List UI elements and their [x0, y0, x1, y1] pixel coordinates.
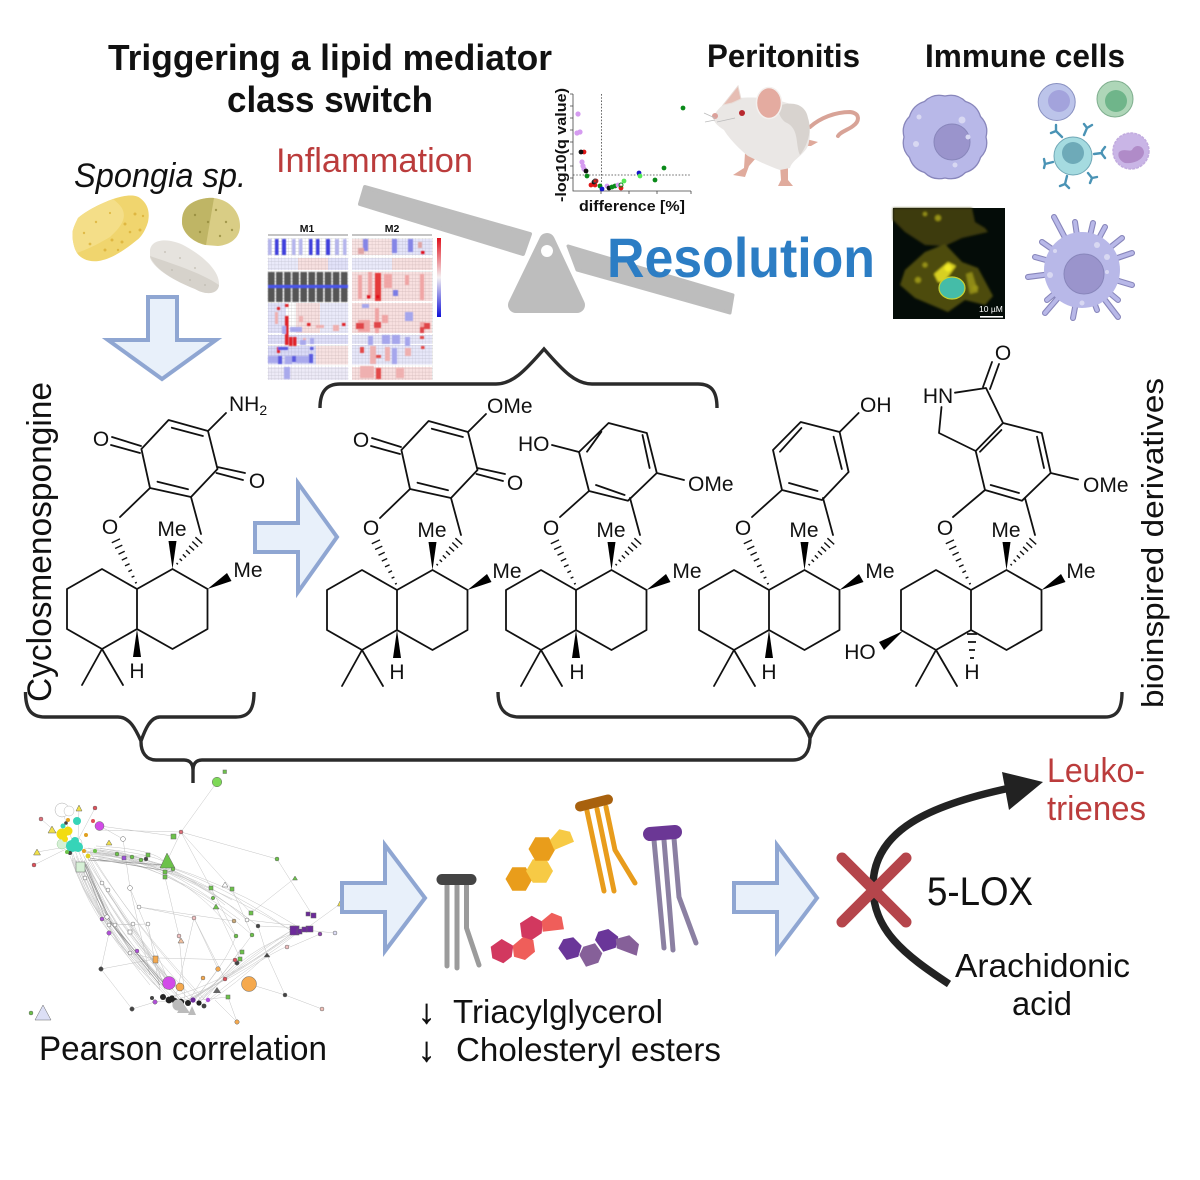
label: lipid decreases: Triacylglycerol — [453, 993, 663, 1030]
icon: immune cell spiky — [1028, 217, 1132, 318]
molecule: isoindolinone derivative: OMe — [1083, 474, 1129, 497]
volcano plot: -log10(q value) — [554, 88, 570, 202]
molecule: HO OMe arene — [506, 423, 734, 686]
heatmap: M1 — [300, 223, 314, 235]
molecule: phenol: Me — [865, 560, 895, 583]
heatmap background tints — [268, 239, 432, 380]
icon: red steroid hexagons — [491, 913, 564, 963]
brace: lower connecting braces — [26, 692, 1122, 783]
label: lipid decreases: ↓ — [418, 993, 435, 1031]
molecule: HO OMe arene: H — [569, 661, 585, 684]
molecule: HO OMe arene: Me — [596, 519, 626, 542]
molecule: cyclosmenospongine: O — [102, 516, 118, 539]
molecule: phenol: O — [735, 517, 751, 540]
molecule: isoindolinone derivative: H — [964, 661, 980, 684]
molecule: OMe quinone: Me — [417, 519, 447, 542]
heading: Immune cells: Immune cells — [925, 38, 1125, 74]
pathway arrow: arachidonic acid to leukotrienes — [873, 772, 1043, 984]
icon: gold steroid hexagons — [506, 829, 574, 891]
arrow: lipids to 5-LOX — [734, 845, 817, 951]
label: lipid decreases: Cholesteryl esters — [456, 1031, 721, 1068]
molecule: HO OMe arene: Me — [672, 560, 702, 583]
molecule: isoindolinone derivative: O — [995, 342, 1011, 365]
icon: immune cell round — [903, 95, 987, 179]
icon: mouse — [704, 86, 858, 186]
heatmap — [267, 223, 441, 380]
volcano plot — [554, 88, 691, 215]
title: Triggering a lipid mediator — [108, 37, 552, 78]
molecule: phenol — [699, 394, 895, 686]
seesaw balance — [360, 187, 733, 313]
label: Resolution: Resolution — [607, 226, 875, 289]
icon: lymphocytes — [1038, 81, 1149, 188]
label: 5-LOX: 5-LOX — [927, 870, 1033, 914]
label: Leukotrienes: Leuko- — [1047, 752, 1145, 790]
heatmap colour scale — [437, 238, 441, 317]
arrow: network to lipids — [342, 845, 425, 951]
network graph — [29, 770, 342, 1024]
molecule: cyclosmenospongine: Me — [157, 518, 187, 541]
brace: top bracket — [320, 349, 717, 408]
label: Leukotrienes — [1047, 752, 1146, 828]
molecule: cyclosmenospongine: NH — [229, 393, 259, 416]
label: Pearson correlation: Pearson correlation — [39, 1030, 327, 1068]
volcano plot: difference [%] — [579, 199, 685, 215]
label: lipid decreases — [418, 993, 721, 1069]
icon: inhibition cross — [842, 858, 906, 922]
molecule: cyclosmenospongine: 2 — [259, 402, 267, 418]
molecule: phenol: H — [761, 661, 777, 684]
molecule: cyclosmenospongine: O — [249, 470, 265, 493]
label: Leukotrienes: trienes — [1047, 790, 1146, 828]
label: Inflammation: Inflammation — [276, 142, 473, 180]
molecule: OMe quinone: H — [389, 661, 405, 684]
molecule: phenol: OH — [860, 394, 892, 417]
molecule: cyclosmenospongine — [67, 393, 267, 685]
icon: orange lipid — [580, 800, 635, 891]
molecule: cyclosmenospongine: O — [93, 428, 109, 451]
micrograph — [893, 208, 1005, 319]
molecule: isoindolinone derivative: Me — [991, 519, 1021, 542]
molecule: isoindolinone derivative: HN — [923, 385, 953, 408]
icon: grey lipid — [442, 880, 479, 968]
molecule: OMe quinone: OMe — [487, 395, 533, 418]
icon: purple lipid — [650, 832, 696, 950]
molecule: OMe quinone: O — [353, 429, 369, 452]
heatmap: M2 — [385, 223, 399, 235]
label: Arachidonic acid — [955, 947, 1130, 1022]
molecule: HO OMe arene: OMe — [688, 473, 734, 496]
icon: sponges — [72, 195, 240, 293]
micrograph: 10 µM — [979, 304, 1003, 314]
molecule: cyclosmenospongine: H — [129, 660, 145, 683]
molecule: isoindolinone derivative: HO — [844, 641, 876, 664]
arrow: to derivatives — [255, 483, 337, 592]
heatmap M1 colour cells — [268, 239, 348, 379]
molecule: OMe quinone: O — [363, 517, 379, 540]
molecule: OMe quinone: Me — [492, 560, 522, 583]
label: lipid decreases: ↓ — [418, 1031, 435, 1069]
molecule: HO OMe arene: O — [543, 517, 559, 540]
heading: Peritonitis: Peritonitis — [707, 38, 860, 74]
molecule: HO OMe arene: HO — [518, 433, 550, 456]
molecule: OMe quinone — [327, 395, 533, 686]
label: bioinspired derivatives: bioinspired derivatives — [1135, 378, 1170, 708]
molecule: cyclosmenospongine: Me — [233, 559, 263, 582]
molecule: phenol: Me — [789, 519, 819, 542]
title — [108, 37, 552, 120]
molecule: OMe quinone: O — [507, 472, 523, 495]
label: Arachidonic acid: Arachidonic — [955, 947, 1130, 984]
molecule: isoindolinone derivative: O — [937, 517, 953, 540]
label: Arachidonic acid: acid — [1012, 985, 1072, 1022]
arrow: down from sponges — [108, 297, 216, 379]
molecule: isoindolinone derivative: Me — [1066, 560, 1096, 583]
label: Spongia sp.: Spongia sp. — [74, 157, 246, 195]
title: class switch — [227, 79, 433, 120]
label: Cyclosmenospongine: Cyclosmenospongine — [21, 382, 59, 702]
molecule: isoindolinone derivative — [844, 342, 1129, 686]
heatmap M2 colour cells — [356, 239, 430, 379]
icon: purple steroid hexagons — [558, 929, 639, 967]
